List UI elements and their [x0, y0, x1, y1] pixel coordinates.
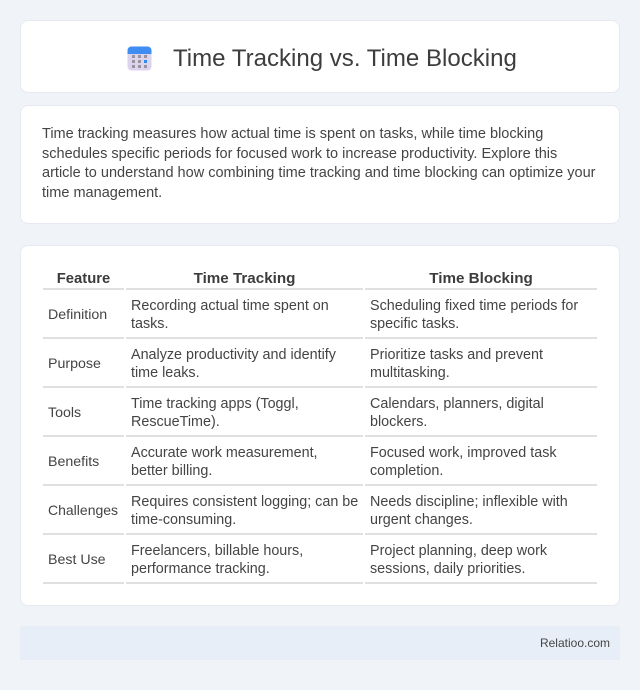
table header: Time Blocking [429, 270, 533, 287]
row: Definition: specific tasks. [370, 316, 459, 332]
row: Purpose [43, 347, 597, 388]
footer [20, 626, 620, 660]
row: Definition: Definition [48, 307, 107, 323]
row: Tools: RescueTime). [131, 414, 220, 430]
row: Tools: Calendars, planners, digital [370, 396, 544, 412]
row: Challenges: Needs discipline; inflexible with [370, 494, 568, 510]
row: Tools: blockers. [370, 414, 427, 430]
row: Purpose: Purpose [48, 356, 101, 372]
text block: introduction [42, 126, 596, 200]
text block: introduction: Time tracking measures how actual time is spent on tasks, while time blocking [42, 126, 543, 142]
row: Definition [43, 298, 597, 339]
row: Definition: Recording actual time spent on [131, 298, 329, 314]
row: Best Use: performance tracking. [131, 561, 270, 577]
row: Benefits: better billing. [131, 463, 212, 479]
row: Benefits: Benefits [48, 454, 99, 470]
row: Tools [43, 396, 597, 437]
row: Purpose: Prioritize tasks and prevent [370, 347, 543, 363]
row: Purpose: Analyze productivity and identify [131, 347, 336, 363]
row: Best Use: Freelancers, billable hours, [131, 543, 303, 559]
icon: calendar [128, 46, 152, 70]
row: Best Use: Project planning, deep work [370, 543, 547, 559]
row: Best Use: Best Use [48, 552, 106, 568]
text block: introduction: article to understand how combining time tracking and time blocking can optimize your [42, 165, 596, 181]
row: Purpose: time leaks. [131, 365, 200, 381]
row: Purpose: multitasking. [370, 365, 450, 381]
text block: introduction: time management. [42, 184, 162, 200]
row: Definition: tasks. [131, 316, 168, 332]
row: Benefits: Accurate work measurement, [131, 445, 318, 461]
table header: Feature [57, 271, 110, 287]
title: Time Tracking vs. Time Blocking [173, 45, 517, 72]
row: Tools: Tools [48, 405, 81, 421]
text block: introduction: schedules specific periods for focused work to increase productivity. Explore this [42, 146, 557, 162]
row: Challenges: urgent changes. [370, 512, 473, 528]
panel: comparison table [20, 245, 620, 606]
row: Challenges: time-consuming. [131, 512, 236, 528]
row: Benefits [43, 445, 597, 486]
row: Best Use: sessions, daily priorities. [370, 561, 525, 577]
row: Challenges: Requires consistent logging; can be [131, 494, 358, 510]
row: Tools: Time tracking apps (Toggl, [131, 396, 299, 412]
row: Benefits: Focused work, improved task [370, 445, 557, 461]
panel: header [20, 20, 620, 93]
table header [43, 270, 597, 290]
row: Benefits: completion. [370, 463, 443, 479]
footer credit: Relatioo.com [540, 636, 610, 650]
row: Challenges: Challenges [48, 502, 118, 518]
row: Challenges [43, 494, 597, 535]
panel: introduction [20, 105, 620, 224]
row: Definition: Scheduling fixed time periods for [370, 298, 578, 314]
table header: Time Tracking [194, 270, 295, 287]
